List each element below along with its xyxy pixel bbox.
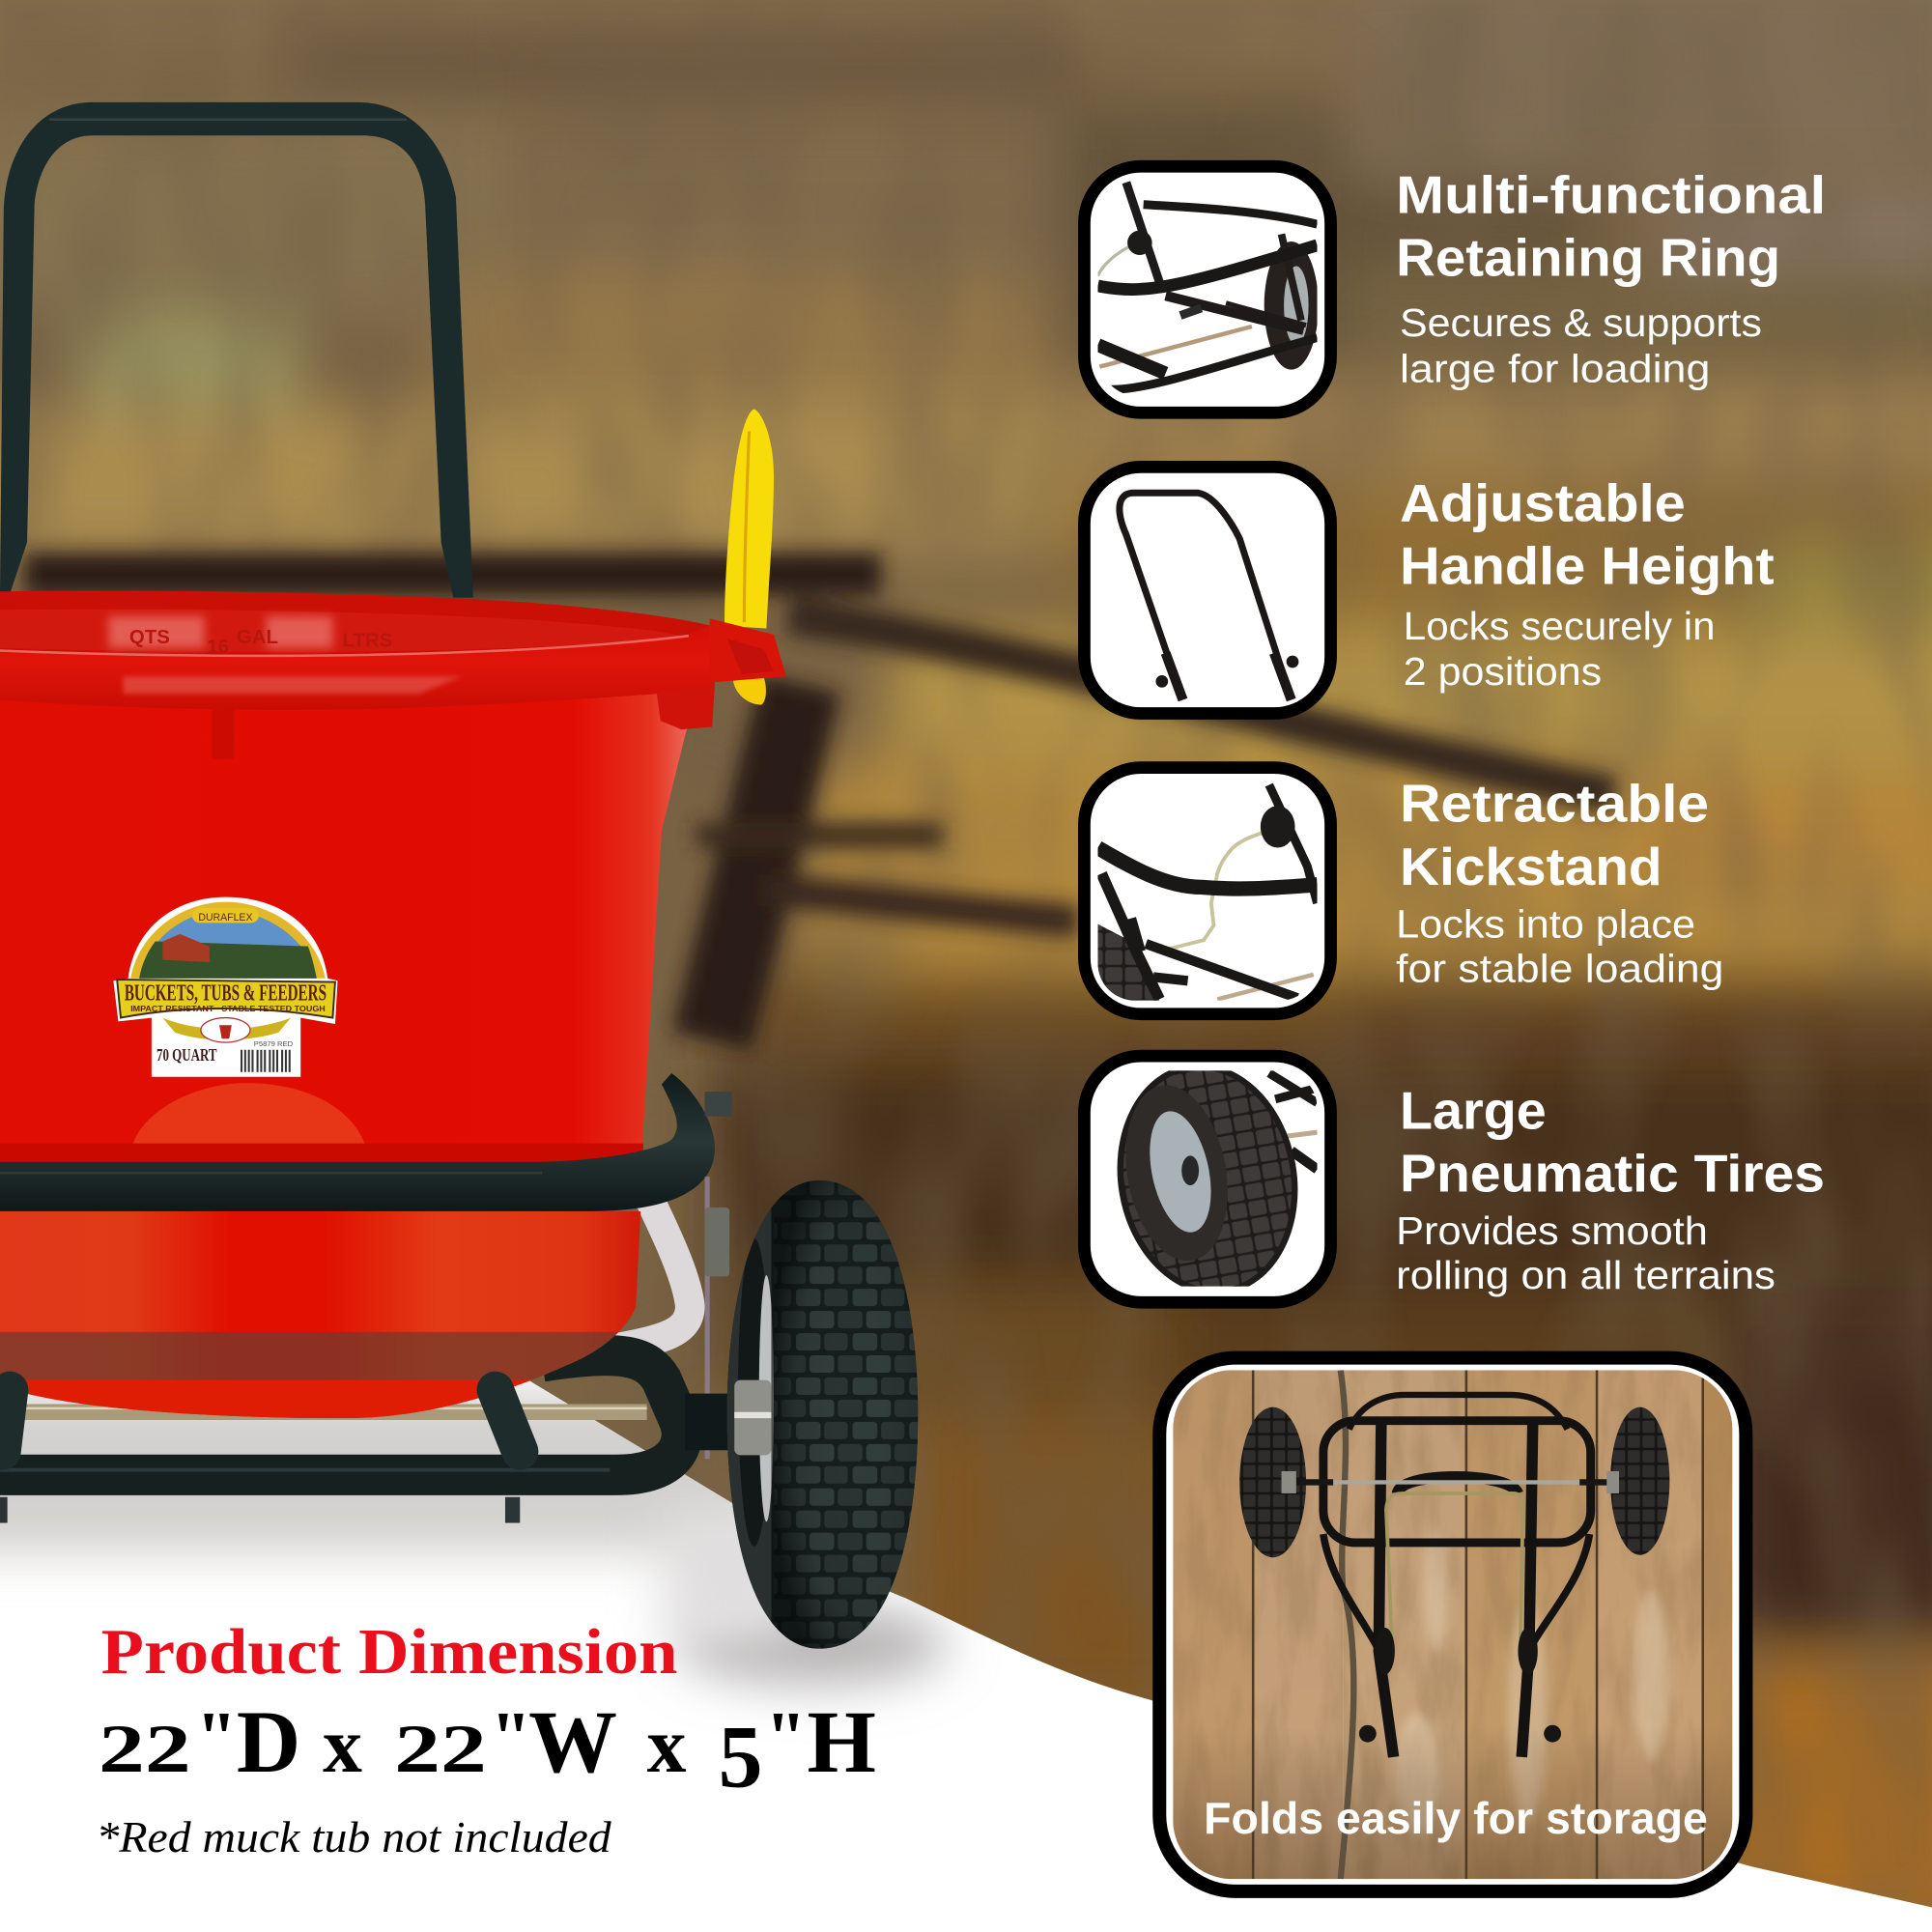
cart rear frame behind tub xyxy=(0,1202,690,1475)
heading: handle height: Handle Height xyxy=(1400,536,1775,596)
frame feet xyxy=(0,1497,513,1523)
axle bracket and hub xyxy=(685,1092,739,1459)
base rail xyxy=(0,1355,682,1475)
icon frame xyxy=(1084,467,1331,714)
tub reflection xyxy=(133,1083,365,1144)
description: pneumatic tires: rolling on all terrains xyxy=(1396,1253,1776,1297)
heading: kickstand: Retractable xyxy=(1400,774,1709,834)
cross tube left xyxy=(3,1390,10,1452)
photo: wood wall and folded cart xyxy=(1173,1370,1732,1879)
cart handle xyxy=(0,102,473,598)
heading: kickstand xyxy=(1400,774,1709,896)
banner title: BUCKETS, TUBS & FEEDERS xyxy=(125,980,327,1007)
embossed capacity marks: GAL xyxy=(237,627,278,648)
dimensions: " xyxy=(765,1696,807,1778)
description: retaining ring: Secures & supports xyxy=(1400,300,1762,345)
description: kickstand xyxy=(1396,902,1723,991)
panel: pneumatic tires xyxy=(1084,1053,1331,1306)
description: handle height: Locks securely in xyxy=(1404,604,1716,648)
icon: tire xyxy=(1103,1053,1318,1306)
description: kickstand: Locks into place xyxy=(1396,902,1695,947)
heading: pneumatic tires xyxy=(1400,1080,1825,1203)
panel: kickstand xyxy=(1084,768,1331,1014)
description: handle height xyxy=(1404,604,1716,694)
heading: retaining ring: Multi-functional xyxy=(1396,165,1826,225)
rim lip highlights xyxy=(0,635,689,694)
embossed capacity marks: LTRS xyxy=(343,631,392,652)
icon frame xyxy=(1084,1056,1331,1302)
icon: ring photo xyxy=(1097,183,1319,389)
heading: pneumatic tires: Pneumatic Tires xyxy=(1400,1143,1825,1203)
part number: P5879 RED xyxy=(254,1039,294,1048)
description: kickstand: for stable loading xyxy=(1396,947,1723,991)
icon frame xyxy=(1084,166,1331,412)
rim inner face xyxy=(0,610,680,652)
barcode xyxy=(242,1050,290,1072)
dimensions: H xyxy=(807,1692,876,1791)
card border xyxy=(1159,1358,1746,1891)
dimensions: D xyxy=(237,1692,300,1791)
cross tube right xyxy=(496,1390,520,1452)
tub lower body xyxy=(0,1211,643,1421)
tub rim back xyxy=(0,591,721,655)
dimensions: W xyxy=(528,1692,617,1791)
yellow banner xyxy=(117,980,335,1018)
heading: kickstand: Kickstand xyxy=(1400,837,1662,896)
size text: 70 QUART xyxy=(156,1045,217,1065)
dimensions: 22 xyxy=(394,1711,487,1787)
description: pneumatic tires xyxy=(1396,1208,1776,1297)
dimensions: x xyxy=(323,1701,362,1789)
dimensions: x xyxy=(647,1701,687,1789)
panel: retaining ring xyxy=(1084,166,1331,412)
brand name: DURAFLEX xyxy=(198,912,253,923)
dimensions: 22 xyxy=(99,1711,191,1787)
rim notch xyxy=(212,710,234,759)
red muck tub xyxy=(0,591,786,1421)
cart front tubes and feet xyxy=(0,1390,520,1523)
description: handle height: 2 positions xyxy=(1404,649,1602,694)
banner subtitle: IMPACT RESISTANT · STABLE TESTED TOUGH xyxy=(130,1004,326,1013)
embossed capacity marks: QTS xyxy=(129,627,170,648)
folded cart wheels xyxy=(1239,1407,1306,1557)
icon: handle xyxy=(1120,493,1298,699)
white swoosh base xyxy=(0,1355,1932,1932)
description: retaining ring xyxy=(1400,300,1762,390)
dimensions: " xyxy=(196,1696,237,1778)
rim inner highlights xyxy=(108,616,332,648)
tub upper body xyxy=(0,690,715,1171)
dimensions: 5 xyxy=(719,1707,763,1805)
retaining ring xyxy=(0,1073,715,1211)
icon frame xyxy=(1084,768,1331,1014)
description: retaining ring: large for loading xyxy=(1400,346,1710,390)
ribbon xyxy=(162,1018,291,1040)
disclaimer: *Red muck tub not included xyxy=(96,1812,612,1861)
rim tab xyxy=(657,685,715,729)
rim lip xyxy=(0,622,715,710)
caption: Folds easily for storage xyxy=(1204,1793,1708,1843)
rim lug xyxy=(710,618,786,683)
folded cart frame xyxy=(1323,1395,1591,1757)
heading: handle height xyxy=(1400,473,1775,596)
heading: pneumatic tires: Large xyxy=(1400,1080,1547,1140)
embossed capacity marks: 16 xyxy=(207,637,229,658)
product label on tub xyxy=(113,897,337,1077)
tub base shadow xyxy=(0,1144,643,1171)
product dimension heading: Product Dimension xyxy=(101,1617,678,1688)
heading: handle height: Adjustable xyxy=(1400,473,1686,533)
embossed capacity marks xyxy=(129,627,392,658)
panel: folds for storage xyxy=(1159,1358,1746,1891)
yellow rope xyxy=(724,409,774,705)
panel: handle height xyxy=(1084,467,1331,714)
description: pneumatic tires: Provides smooth xyxy=(1396,1208,1708,1253)
axle rod xyxy=(0,1406,647,1418)
dimensions: " xyxy=(491,1696,531,1778)
heading: retaining ring: Retaining Ring xyxy=(1396,228,1780,288)
heading: retaining ring xyxy=(1396,165,1826,288)
white support strut xyxy=(604,1202,690,1350)
wheel xyxy=(724,1171,925,1663)
icon: kickstand xyxy=(1097,784,1318,1001)
